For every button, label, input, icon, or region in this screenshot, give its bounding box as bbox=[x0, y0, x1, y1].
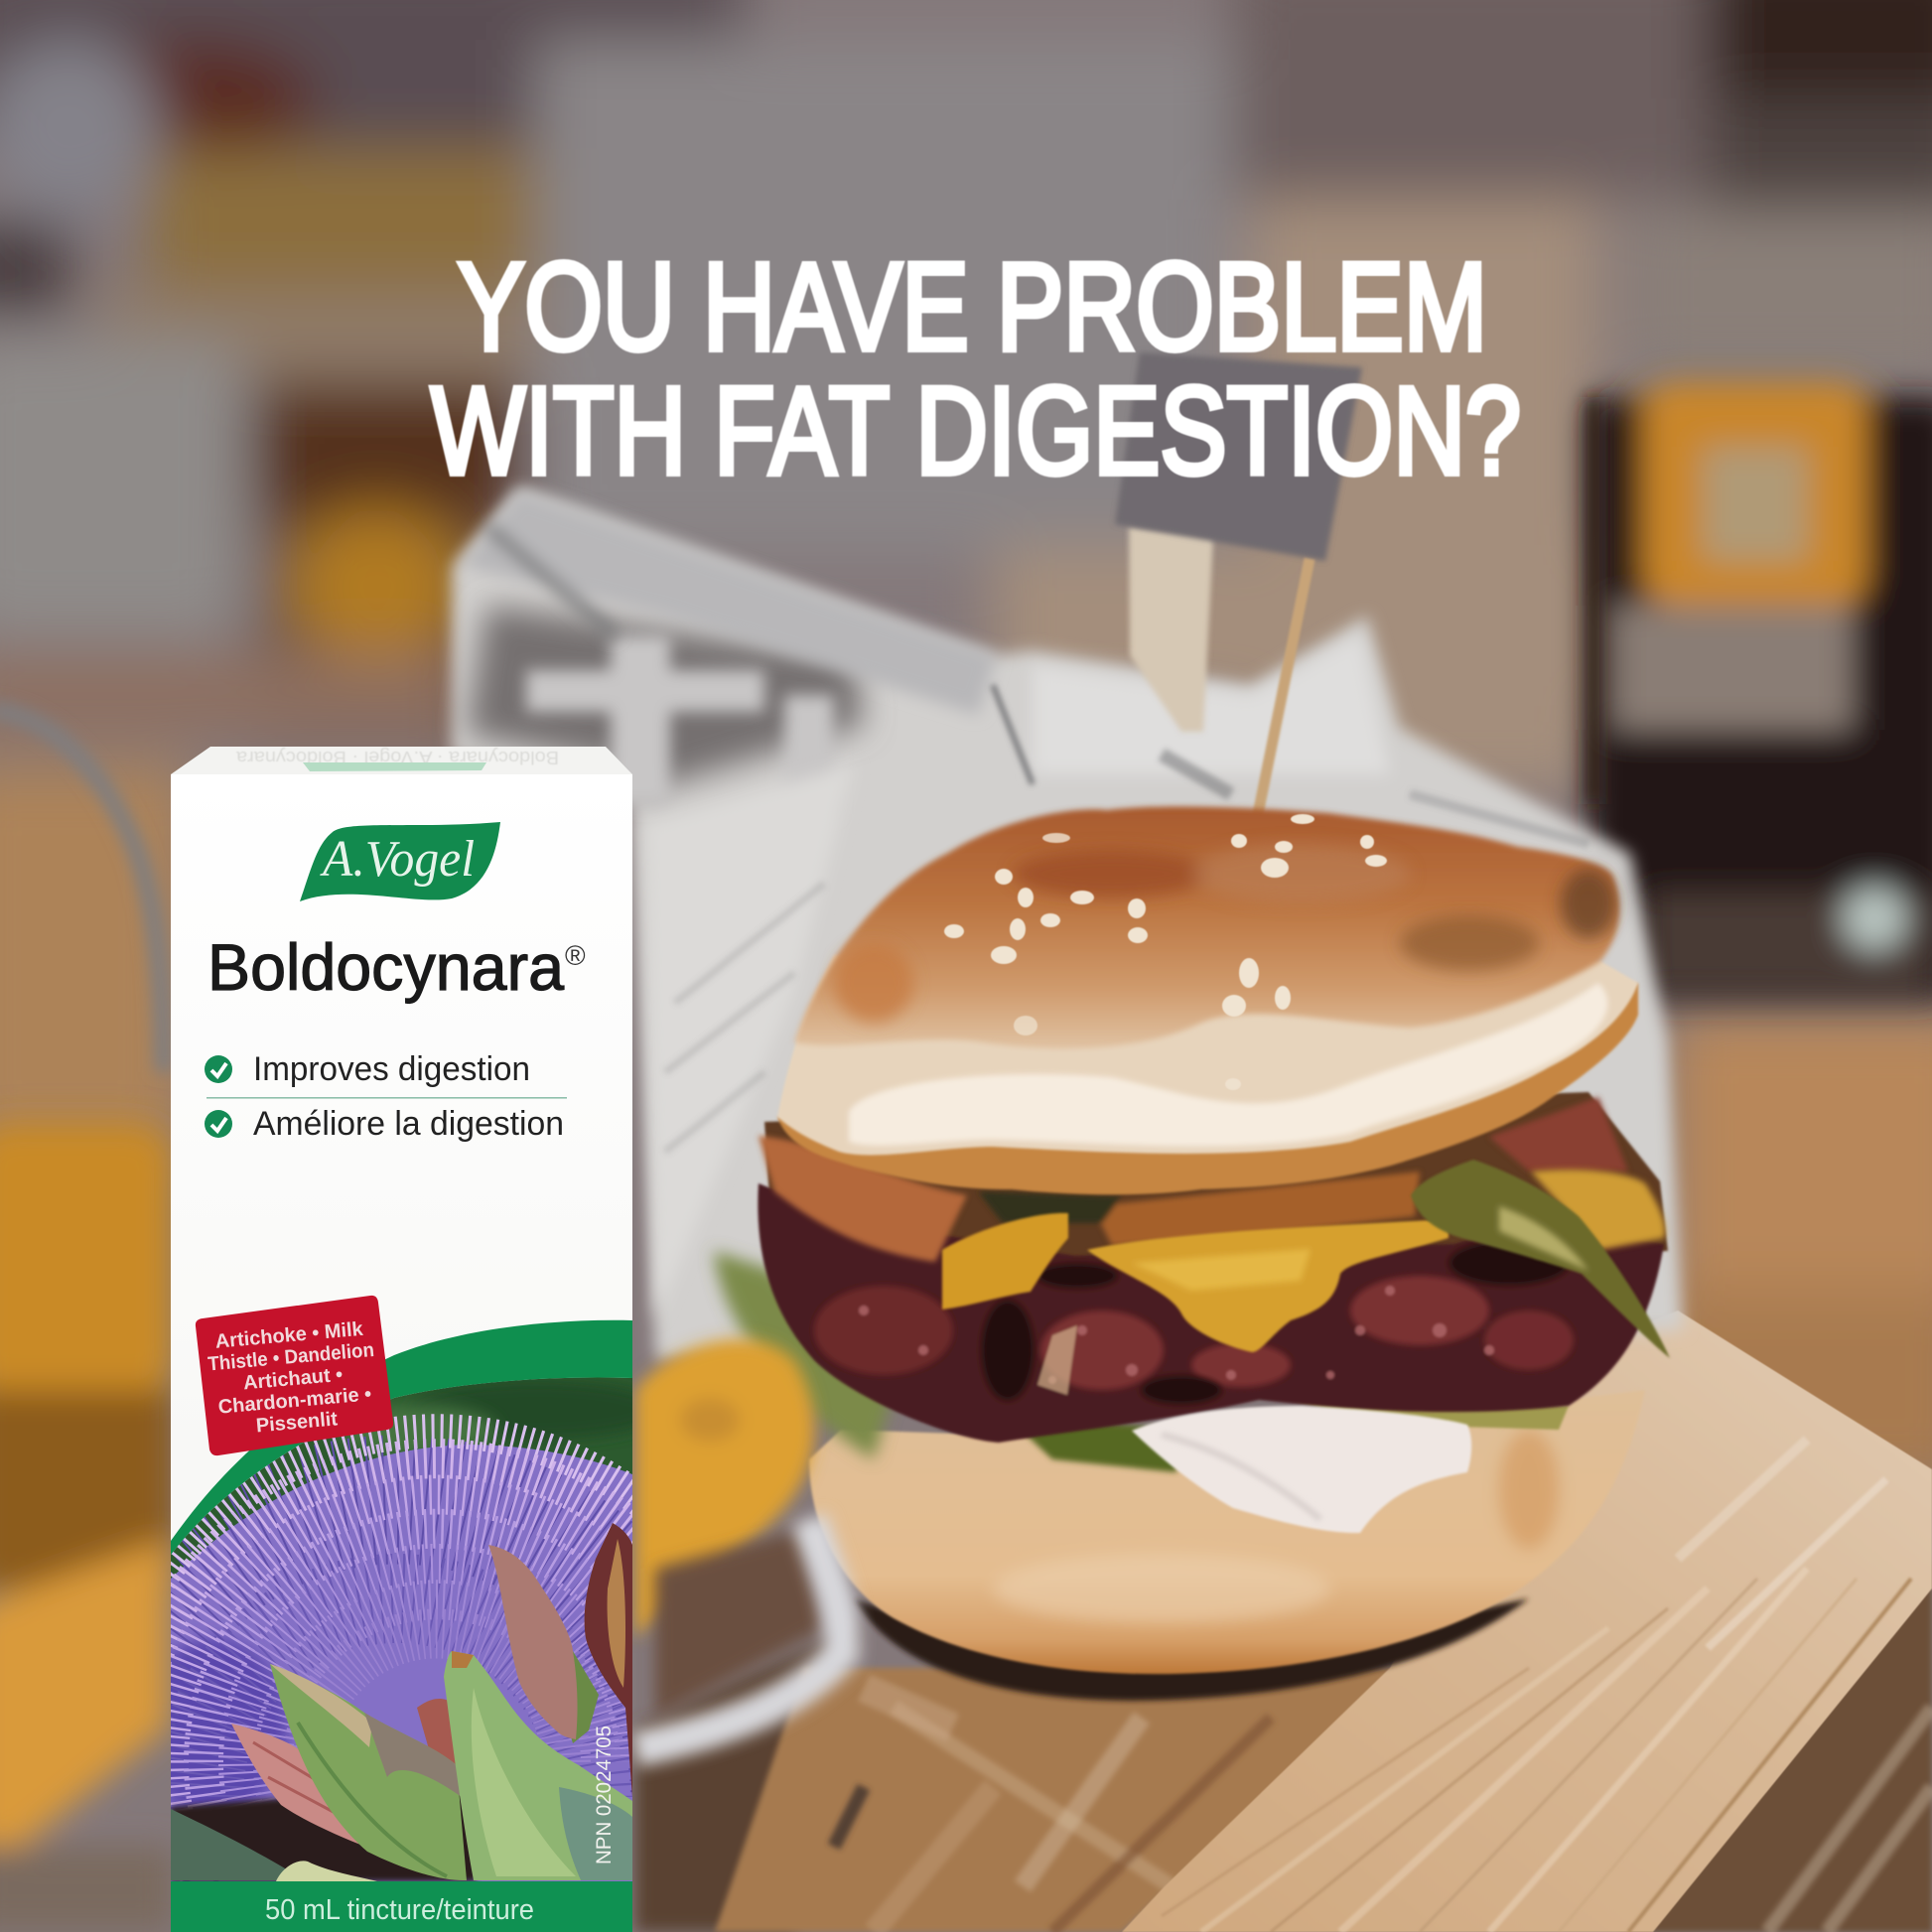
paper: dark lattice background bbox=[467, 606, 864, 794]
burger: cheese bbox=[942, 1170, 1665, 1352]
artichoke: dark right bract bbox=[585, 1523, 632, 1797]
artichoke: pink bract bbox=[231, 1724, 360, 1845]
artichoke: small bud bbox=[417, 1699, 456, 1764]
artichoke flower bbox=[171, 1414, 632, 1881]
artichoke: pink-green bud bbox=[572, 1651, 599, 1743]
benefit: improves digestion: Improves digestion bbox=[253, 1050, 530, 1088]
burger: bottom bun bbox=[809, 1390, 1645, 1674]
red ingredient label: Chardon-marie • bbox=[217, 1383, 372, 1419]
box: upside-down flap text: Boldocynara · A.Vogel · Boldocynara bbox=[235, 748, 559, 767]
artichoke: right big bract bbox=[444, 1651, 632, 1880]
bottom green band: 50 mL tincture/teinture bbox=[265, 1894, 534, 1926]
box: flap green mark bbox=[303, 762, 486, 771]
burger: top bun crown bbox=[794, 806, 1619, 1048]
benefit: améliore la digestion: Améliore la digestion bbox=[253, 1105, 564, 1143]
title bbox=[431, 238, 1521, 500]
paper: light lattice bars bbox=[526, 635, 834, 814]
paper: fold creases and print bbox=[665, 685, 1588, 1152]
newspaper wrap bbox=[452, 486, 1683, 1360]
flag and toothpick bbox=[1115, 352, 1362, 844]
fries and blurred foreground left bbox=[0, 1122, 174, 1932]
burger: pickle bbox=[1411, 1160, 1670, 1358]
burger: sesame seeds bbox=[944, 814, 1387, 1090]
burger bbox=[714, 806, 1670, 1701]
burger: onion bbox=[1132, 1406, 1471, 1533]
burger: backing between bun and patty bbox=[764, 1092, 1668, 1271]
blurred fry in foreground bbox=[635, 1339, 814, 1638]
box: top flap bbox=[171, 747, 632, 774]
NPN number: NPN 02024705 bbox=[593, 1725, 616, 1864]
box: front panel bbox=[171, 774, 632, 1932]
paper: upper diagonal strip bbox=[462, 491, 1390, 1320]
artichoke: center green bract bbox=[270, 1664, 467, 1880]
burger: crown shading bbox=[834, 844, 1616, 1023]
artichoke: dark base bbox=[171, 1787, 477, 1881]
bottom green band bbox=[171, 1881, 632, 1932]
burger: patty bbox=[758, 1183, 1664, 1443]
logo: A.Vogel leaf: A.Vogel bbox=[320, 831, 475, 888]
title: WITH FAT DIGESTION? bbox=[431, 362, 1521, 500]
board: worn wood bbox=[715, 1668, 1410, 1932]
title: YOU HAVE PROBLEM bbox=[458, 238, 1487, 376]
red ingredient label: Pissenlit bbox=[255, 1408, 339, 1437]
blurred basket in foreground bbox=[635, 1519, 842, 1749]
artichoke: grey-green bottom leaf bbox=[171, 1809, 286, 1880]
burger: top bun underside crust bbox=[777, 983, 1638, 1194]
artichoke photo bbox=[171, 1378, 632, 1881]
burger: sauce bbox=[759, 1097, 1628, 1262]
toothpick bbox=[1252, 559, 1310, 844]
burger: shadow beneath bbox=[854, 1598, 1529, 1701]
board: dark table at right corner bbox=[1618, 1559, 1932, 1932]
red ingredient label: Artichaut • bbox=[242, 1364, 344, 1394]
burger: lettuce bbox=[714, 1251, 1569, 1472]
basket: white rim bbox=[635, 1519, 842, 1749]
flag: grey pennant bbox=[1115, 352, 1362, 561]
cutting board bbox=[635, 1311, 1932, 1932]
logo: A.Vogel leaf bbox=[300, 822, 500, 901]
red ingredient label: Thistle • Dandelion bbox=[207, 1339, 375, 1375]
burger: crumb highlight bbox=[849, 983, 1607, 1147]
paper: main silhouette bbox=[452, 486, 1683, 1360]
divider line bbox=[207, 1097, 567, 1099]
board: blurred left wood bbox=[635, 1628, 854, 1932]
wire basket handle bbox=[0, 710, 164, 1072]
flag: beige stick bbox=[1129, 526, 1213, 732]
product name: Boldocynara bbox=[207, 930, 564, 1004]
red ingredient label: Artichoke • Milk bbox=[214, 1318, 364, 1353]
red ingredient label bbox=[196, 1296, 393, 1455]
burger: top bun crumb bbox=[777, 955, 1638, 1155]
green swoosh bbox=[171, 1320, 632, 1555]
product box bbox=[171, 747, 632, 1932]
product name: ® bbox=[565, 940, 586, 971]
board: light plank bbox=[1122, 1311, 1932, 1932]
basket: interior bbox=[655, 1529, 824, 1718]
